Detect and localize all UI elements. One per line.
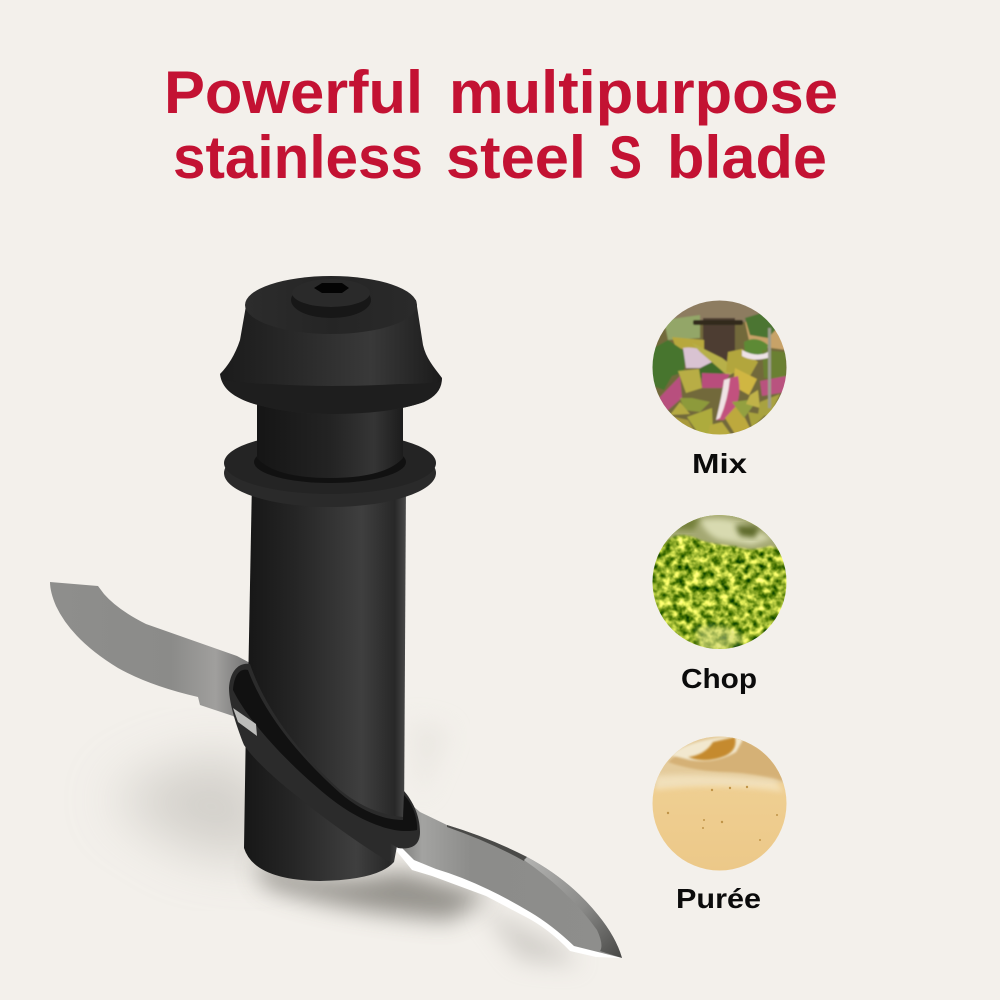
cilantro leaves [650,340,686,390]
mixer shaft [703,318,735,364]
upper column [248,480,406,825]
title: multipurpose [449,59,838,126]
neck [257,395,403,478]
title: S [609,124,642,191]
speckles [667,786,778,841]
cast shadow under blade assembly [110,720,580,965]
title: Powerful [164,59,423,126]
title [164,59,838,191]
lower cylinder [244,720,400,881]
title: blade [667,124,827,191]
label: mix: Mix [692,448,747,479]
label: chop: Chop [681,663,757,694]
S blade assembly [50,276,622,958]
food photo: chop [650,512,790,652]
onion slices and avocado [683,348,716,368]
blade: right wing [390,795,622,958]
cap with flared rim [220,276,442,414]
flange [224,432,436,507]
angled hub band [229,664,420,862]
label: puree: Purée [676,883,761,914]
title: stainless [173,124,423,191]
food photo: mix [650,298,790,438]
title: steel [446,124,586,191]
food photo: puree [650,735,790,875]
hex socket [314,283,349,293]
blade: left wing [50,582,252,730]
